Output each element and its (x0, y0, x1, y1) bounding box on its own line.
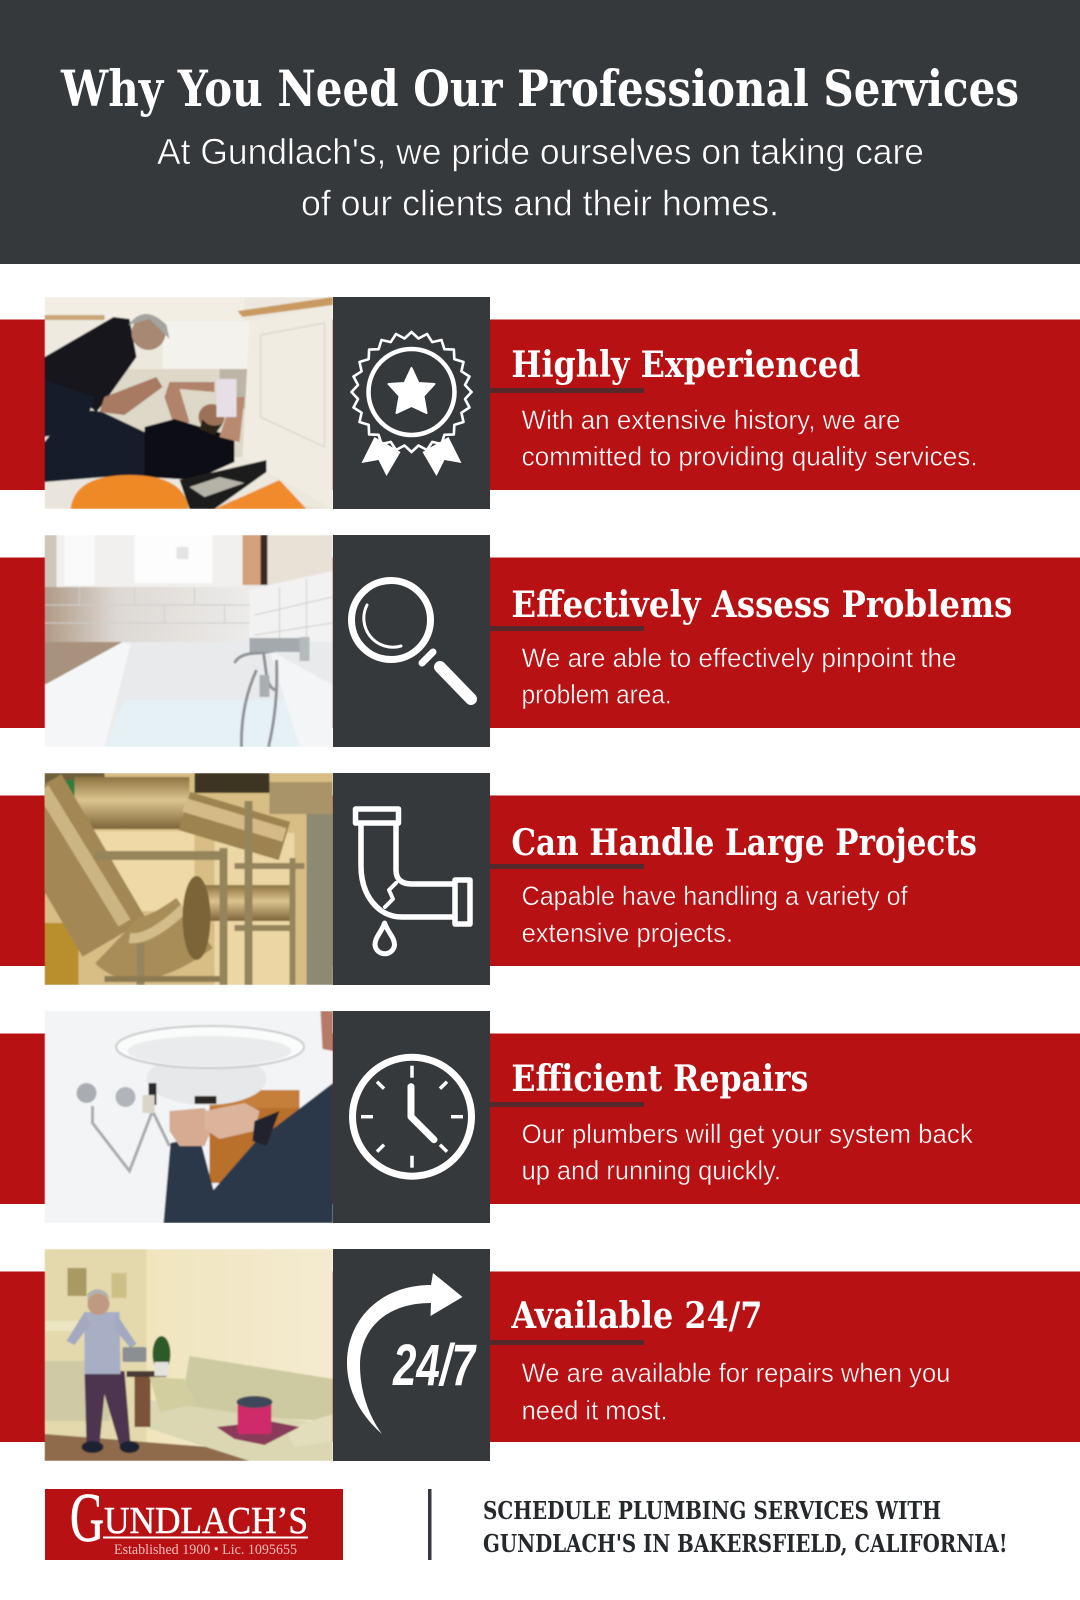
icon: clock (352, 1057, 472, 1176)
subtitle (157, 131, 924, 224)
body text: up and running quickly. (522, 1156, 781, 1186)
panel: highly experienced (0, 297, 1080, 509)
subtitle: At Gundlach's, we pride ourselves on taking care (157, 131, 924, 172)
subtitle: of our clients and their homes. (301, 182, 779, 224)
heading: Efficient Repairs (511, 1058, 808, 1100)
logo: UNDLACH’S (104, 1500, 308, 1542)
body text (522, 1358, 950, 1426)
body text: We are available for repairs when you (522, 1358, 950, 1388)
logo: Established 1900 • Lic. 1095655 (114, 1542, 297, 1558)
panel: can handle large projects (0, 773, 1080, 985)
dark icon panel (333, 773, 490, 985)
icon: 24/7 arrow: 24/7 (392, 1333, 477, 1398)
underline (490, 626, 644, 631)
heading: Available 24/7 (511, 1295, 762, 1337)
photo: man in flooded living room (44, 1249, 333, 1461)
dark icon panel (333, 1011, 490, 1223)
body text (522, 405, 978, 472)
photo: water heater repair (44, 1011, 333, 1223)
call to action: SCHEDULE PLUMBING SERVICES WITH (483, 1496, 941, 1525)
icon: magnifying glass (352, 580, 471, 699)
icon: 24/7 arrow (347, 1273, 477, 1434)
heading: Effectively Assess Problems (511, 584, 1012, 626)
dark icon panel (333, 1249, 490, 1461)
dark icon panel (333, 297, 490, 509)
icon: award badge (352, 332, 472, 476)
body text: Our plumbers will get your system back (522, 1119, 973, 1149)
body text (522, 643, 957, 710)
body text: extensive projects. (522, 918, 733, 948)
heading: Can Handle Large Projects (511, 822, 977, 864)
body text: problem area. (522, 680, 672, 710)
heading: Highly Experienced (511, 344, 860, 386)
body text: need it most. (522, 1396, 668, 1426)
call to action (483, 1496, 1008, 1558)
underline (490, 864, 644, 869)
body text (522, 881, 908, 948)
photo: industrial pipes (44, 773, 333, 985)
logo: G (70, 1480, 104, 1557)
underline (490, 1102, 644, 1107)
body text: We are able to effectively pinpoint the (522, 643, 957, 673)
body text: With an extensive history, we are (522, 405, 901, 435)
panel: effectively assess problems (0, 535, 1080, 747)
photo: plumbers under sink (44, 297, 333, 509)
underline (490, 388, 644, 393)
footer divider (428, 1489, 432, 1560)
header banner (0, 0, 1080, 264)
panel: efficient repairs (0, 1011, 1080, 1223)
underline (490, 1340, 644, 1345)
body text (522, 1119, 973, 1186)
logo (45, 1480, 343, 1560)
photo: bathtub (44, 535, 333, 747)
body text: Capable have handling a variety of (522, 881, 908, 911)
icon: leaking pipe (356, 809, 470, 954)
body text: committed to providing quality services. (522, 442, 978, 472)
panel: available 24/7 (0, 1249, 1080, 1461)
dark icon panel (333, 535, 490, 747)
